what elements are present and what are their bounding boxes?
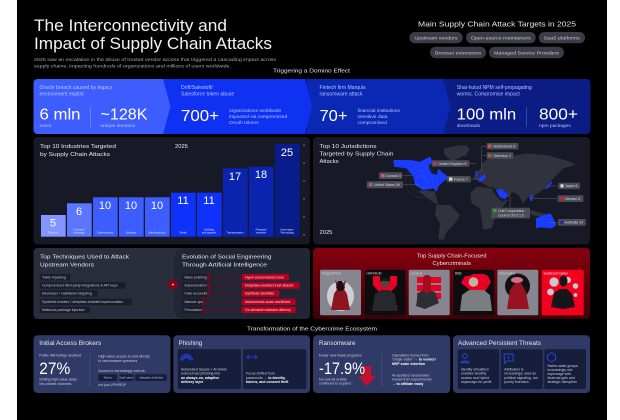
panel: initial access brokers: to ransomware operators	[98, 359, 137, 363]
map connector lines west	[402, 176, 420, 185]
panel: initial access brokers	[34, 335, 170, 393]
panel: advanced persistent threats: Attribution is	[504, 368, 524, 372]
map labels: Canada 3	[386, 174, 401, 178]
panel: ransomware: “single victim” → to vendor/	[392, 358, 436, 362]
bars: Financial	[256, 228, 267, 232]
bars: Cybersecurity	[97, 230, 114, 234]
heading: social engineering evolution	[182, 255, 272, 268]
stat: Shai-hulud: downloads	[457, 123, 481, 129]
diagram: AI evolution rows: Deepfake-enabled trust attacks	[245, 284, 294, 288]
bars: 10	[125, 200, 137, 212]
stat: Shai-hulud: npm packages	[539, 123, 571, 129]
icon: plus connector: +	[172, 282, 175, 288]
list: techniques: Developer / maintainer targeting	[42, 292, 92, 296]
panel: initial access brokers: Initial Access Brokers	[39, 340, 101, 347]
panel: advanced persistent threats: strategic disruption	[548, 380, 577, 384]
stat: Oracle breach: users	[40, 123, 52, 129]
heading: cybercriminals: Top Supply Chain-Focused	[417, 254, 487, 260]
bars: 11	[203, 195, 215, 207]
heading: social engineering evolution: Evolution of Social Engineering	[182, 255, 272, 261]
panel: ransomware: Fewer new RaaS programs	[319, 354, 362, 358]
bars: 11	[177, 195, 189, 207]
stat: Drift Salesloft: 700+	[181, 108, 219, 125]
stat: Marquis	[320, 85, 400, 126]
panel: phishing: passwords → to identity,	[246, 376, 286, 380]
diagram: AI evolution rows: Mass phishing	[184, 275, 207, 279]
panel: top cybercriminals	[313, 248, 590, 319]
map labels: Australia 14	[564, 221, 583, 225]
bars: Manufacturing	[148, 230, 166, 234]
card: DragonForce: DragonForce	[322, 272, 341, 276]
heading: top techniques	[40, 255, 129, 268]
diagram: AI evolution rows	[182, 274, 300, 313]
stat: Drift Salesloft: organizations worldwide	[229, 108, 281, 114]
panel: phishing: Phishing	[178, 340, 203, 347]
map heading: Top 10 Jurisdictions	[320, 144, 377, 150]
stat: Shai-hulud: worms. Compromise impact	[457, 92, 520, 98]
map labels: Netherlands 5	[494, 144, 515, 148]
diagram: AI evolution rows: Autonomous scam workflows	[245, 300, 291, 304]
heading: transformation: Transformation of the Cybercrime Ecosystem	[247, 326, 377, 332]
bars: Food and	[73, 228, 85, 232]
heading: top techniques: Top Techniques Used to Attack	[40, 255, 129, 261]
chart heading: Top 10 Industries Targeted	[40, 144, 116, 150]
stat: Drift Salesloft: OAuth tokens	[229, 120, 259, 126]
bars: Clothing	[204, 228, 214, 232]
title: The Interconnectivity and	[34, 16, 227, 35]
chart heading: by Supply Chain Attacks	[40, 152, 110, 158]
map labels: Gulf Cooperation	[498, 209, 525, 213]
stat: Oracle breach: ~128K	[100, 106, 148, 124]
bars: Information	[280, 228, 294, 232]
list: techniques: Malicious package injection	[42, 308, 85, 312]
panel: top 10 jurisdictions map	[313, 137, 590, 244]
panel: advanced persistent threats: financial gain and	[548, 376, 575, 380]
map labels	[367, 143, 586, 226]
bars: Technology	[280, 230, 294, 234]
list: techniques: Token hijacking	[42, 275, 66, 279]
world map: Americas	[393, 145, 470, 240]
diagram: AI evolution rows: Synthetic identities	[245, 292, 274, 296]
chart heading	[40, 144, 116, 158]
icon: speech bubble	[504, 354, 513, 364]
list: techniques: Synthetic insiders / deepfake-enabled impersonation	[42, 300, 123, 304]
icon: hexagon	[548, 352, 556, 362]
card: BBB: BBB	[455, 272, 462, 276]
panel: initial access brokers: Access is increasingly sold as:	[98, 369, 146, 373]
panel: initial access brokers: Tokens	[103, 376, 112, 380]
bars: services	[256, 230, 267, 234]
card: DragonForce	[320, 270, 361, 315]
stat: Marquis: sensitive data	[358, 114, 388, 120]
panel: advanced persistent threats: increasingly mix	[548, 368, 573, 372]
stat: Marquis: financial institutions	[358, 108, 400, 114]
panel: initial access brokers: Integration footholds	[139, 376, 163, 380]
map labels: Council (GCC) 5	[498, 214, 524, 218]
stat: Oracle breach: environment exploit	[40, 92, 84, 98]
icon: double arrow	[247, 355, 257, 359]
heading: domino effect: Triggering a Domino Effect	[273, 69, 351, 75]
panel: advanced persistent threats: purely forensics	[504, 380, 529, 384]
panel: advanced persistent threats: espionage with	[548, 372, 571, 376]
panel: ransomware: MSP scale extortion	[392, 362, 425, 366]
map labels: United Kingdom 5	[438, 162, 466, 166]
panel: initial access brokers: 27%	[39, 359, 70, 378]
map heading: Targeted by Supply Chain	[320, 152, 394, 158]
stat: Marquis: 70+	[320, 108, 348, 125]
map labels: Vietnam 5	[564, 197, 580, 201]
heading: cybercriminals: Cybercriminals	[433, 261, 471, 267]
map labels: Japan 6	[565, 184, 578, 188]
intro text: supply chains, impacting hundreds of organizations and millions of users worldwide.	[34, 64, 231, 69]
icon: signal waves	[180, 354, 193, 360]
panel: advanced persistent threats: Nation-state groups	[548, 364, 578, 368]
panel: ransomware: but overall activity	[319, 378, 347, 382]
panel: initial access brokers: shifting high-value deals	[39, 378, 77, 382]
panel: initial access brokers: not just VPN/RDP	[98, 383, 127, 387]
stat: Oracle breach: unique domains	[100, 123, 136, 129]
chart year: 2025	[175, 144, 188, 150]
panel: ransomware: Operations moved from	[392, 354, 429, 358]
panel: initial access brokers: into private channels	[39, 382, 72, 386]
panel: phishing: Automated SpaaS + AI-driven	[181, 368, 227, 372]
panel: ransomware: moved from experimental	[392, 378, 432, 382]
stat: Drift Salesloft	[181, 85, 287, 126]
diagram: AI evolution rows: Impersonation	[184, 284, 207, 288]
panel: top 10 industries bar chart	[34, 137, 310, 244]
card: Shai-Hulud: Shai Hulud	[499, 272, 515, 276]
panel: techniques and social engineering	[34, 248, 310, 319]
panel: phishing: tokens, and consent theft	[246, 380, 289, 384]
panel: main attack targets: Managed Service Providers	[494, 50, 560, 56]
bars: Retail	[180, 230, 187, 234]
map labels: France 7	[454, 178, 468, 182]
panel: ransomware: Ransomware	[319, 340, 356, 347]
bars: 5	[50, 218, 56, 230]
panel: ransomware: → to affiliate ready	[392, 382, 423, 386]
heading: top techniques: Upstream Vendors	[40, 262, 94, 268]
icon: person	[461, 354, 469, 363]
panel: ransomware: AI-assisted ransomware	[392, 374, 430, 378]
map heading: Attacks	[320, 159, 339, 165]
card: BBB	[453, 270, 494, 315]
panel: initial access brokers: High-value access is sold directly	[98, 354, 150, 358]
panel: phishing: lures turned phishing into	[181, 372, 220, 376]
bars: 6	[76, 206, 82, 218]
panel: phishing: Focus shifted from	[246, 372, 275, 376]
stat: Marquis: Fintech firm Marquis	[320, 85, 366, 91]
panel: advanced persistent threats: Identity simulation	[461, 368, 489, 372]
stat: Shai-hulud	[457, 85, 578, 129]
card: HAFNIUM: HAFNIUM	[366, 272, 382, 276]
panel: main attack targets: Browser extensions	[435, 50, 482, 56]
panel: initial access brokers: SaaS admin	[119, 376, 134, 380]
intro text: 2025 saw an escalation in the abuse of trusted vendor access that triggered a cascading impact across	[34, 57, 277, 62]
bars	[41, 144, 300, 237]
panel: phishing: an always-on, adaptive	[181, 376, 219, 380]
card: Lazarus: Lazarus	[410, 272, 423, 276]
bars: Telecom	[48, 230, 59, 234]
diagram: AI evolution rows: Fake accounts	[184, 292, 208, 296]
bars: 25	[281, 147, 293, 159]
panel: advanced persistent threats: enables stealthy	[461, 372, 487, 376]
bars: Transportation	[226, 230, 244, 234]
panel: advanced persistent threats	[453, 335, 590, 393]
heading: cybercriminals	[417, 254, 487, 267]
panel: advanced persistent threats: espionage-for-profit	[461, 380, 491, 384]
card: Scattered Spider: Scattered Spider	[544, 272, 569, 276]
bars: 17	[229, 171, 241, 183]
panel: advanced persistent threats: political signaling, not	[504, 376, 538, 380]
stat: Shai-hulud: 800+	[539, 106, 578, 124]
diagram: AI evolution rows: Hyper-personalized lures	[245, 275, 284, 279]
panel: main attack targets: Open-source maintainers	[471, 36, 531, 42]
bars: beverage	[73, 230, 85, 234]
stat: Marquis: compromised	[358, 120, 387, 126]
chart axis ticks	[303, 144, 305, 236]
bars: 10	[151, 200, 163, 212]
panel: main attack targets: SaaS platforms	[544, 36, 580, 42]
stat: Drift Salesloft: impacted via compromised	[229, 114, 287, 120]
bars: 18	[255, 169, 267, 181]
panel: advanced persistent threats: Advanced Persistent Threats	[458, 340, 541, 347]
panel: main attack targets	[409, 22, 585, 58]
card: HAFNIUM	[365, 270, 405, 315]
panel: advanced persistent threats: increasingly used as	[504, 372, 536, 376]
icon: red down arrow	[358, 366, 376, 386]
title	[34, 16, 272, 53]
panel: advanced persistent threats: access and hybrid	[461, 376, 489, 380]
stat: Marquis: ransomware attack	[320, 92, 363, 98]
panel: initial access brokers: Public IAB listings declined	[39, 353, 81, 357]
panel: domino effect banner	[34, 79, 590, 134]
intro text	[34, 57, 277, 69]
diagram: AI evolution rows: Persuasion	[184, 308, 202, 312]
card: Lazarus	[409, 270, 450, 315]
panel: ransomware: continued to expand	[319, 382, 351, 386]
card: Scattered Spider	[542, 270, 584, 315]
map labels: Germany 2	[494, 154, 511, 158]
heading: social engineering evolution: Through Artificial Intelligence	[182, 262, 267, 268]
panel: main attack targets: Main Supply Chain Attack Targets in 2025	[418, 22, 576, 28]
world map: Europe Africa Asia Oceania	[460, 145, 575, 229]
stat: Shai-hulud: 100 mln	[457, 106, 516, 124]
stat: Shai-hulud: Shai-hulud NPM self-propagating	[457, 85, 532, 91]
panel: ransomware: -17.9%	[319, 359, 365, 378]
panel: ransomware	[313, 335, 450, 393]
stat: Oracle breach: 6 mln	[40, 106, 80, 124]
bars: 10	[99, 200, 111, 212]
bars: and apparel	[202, 230, 216, 234]
list: techniques: Compromised third-party integrations & API keys	[42, 284, 118, 288]
icon: plus connector	[168, 280, 178, 290]
panel: phishing	[173, 335, 310, 393]
diagram: AI evolution rows: Manual ops	[184, 300, 203, 304]
panel: main attack targets: Upstream vendors	[414, 36, 458, 42]
panel: phishing: delivery layer	[181, 380, 204, 384]
list: techniques	[40, 274, 132, 313]
stat: Drift Salesloft: Salesforce token abuse	[181, 92, 234, 98]
card: Shai-Hulud	[497, 270, 538, 315]
stat: Oracle breach	[40, 85, 148, 129]
map heading	[320, 144, 394, 165]
bars: Software	[126, 230, 137, 234]
map year: 2025	[320, 230, 332, 236]
stat: Oracle breach: Oracle breach caused by legacy	[40, 85, 113, 91]
diagram: AI evolution rows: On-demand malware delivery	[245, 308, 291, 312]
map labels: United States 59	[374, 183, 400, 187]
stat: Drift Salesloft: Drift/Salesloft/	[181, 85, 213, 91]
title: Impact of Supply Chain Attacks	[34, 34, 272, 53]
